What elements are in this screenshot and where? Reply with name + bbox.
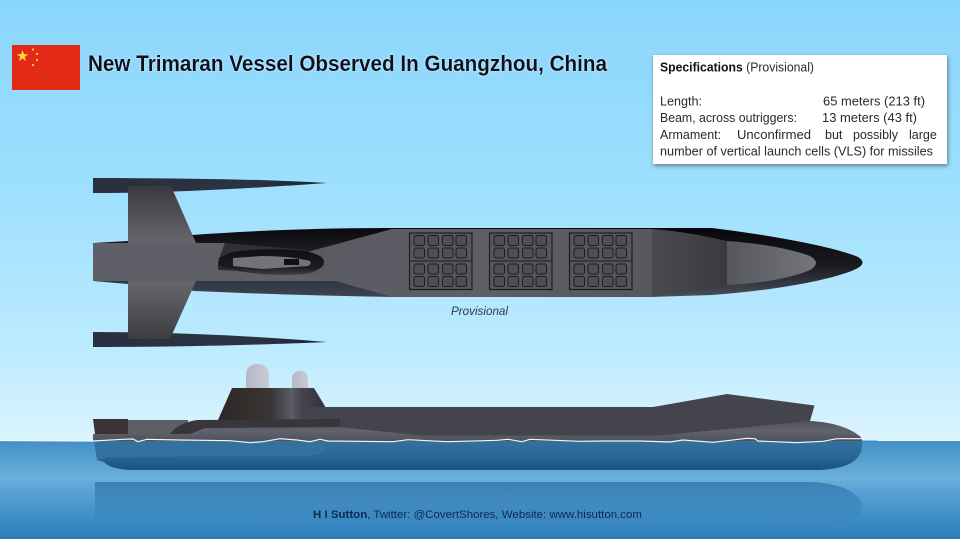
panel: specifications bbox=[653, 55, 947, 164]
specifications heading: Specifications (Provisional) bbox=[660, 60, 814, 74]
water reflection of hull bbox=[95, 482, 862, 530]
top wing strut bbox=[128, 186, 196, 243]
beam label: Beam, across outriggers: bbox=[660, 111, 797, 125]
dome small bbox=[292, 371, 308, 388]
bottom outrigger bbox=[93, 332, 327, 347]
bow bbox=[650, 228, 862, 297]
title: New Trimaran Vessel Observed In Guangzhou, China bbox=[88, 51, 608, 76]
armament text bbox=[660, 128, 937, 142]
superstructure outline bbox=[219, 249, 324, 275]
superstructure tower bbox=[218, 388, 326, 420]
bow nose panel bbox=[727, 241, 816, 285]
credit line: H I Sutton, Twitter: @CovertShores, Website: www.hisutton.com bbox=[313, 509, 642, 521]
recessed well deck bbox=[218, 243, 307, 262]
armament text: Unconfirmed bbox=[737, 128, 811, 142]
superstructure roof bbox=[233, 256, 311, 269]
stern superstructure light bbox=[128, 420, 188, 434]
foredeck bbox=[307, 229, 652, 297]
mid band bbox=[170, 419, 340, 434]
armament text: possibly bbox=[853, 128, 899, 142]
stern deck bbox=[93, 243, 335, 281]
hull below water bbox=[97, 441, 862, 470]
VLS block 2 bbox=[490, 233, 552, 290]
dome large bbox=[246, 364, 269, 388]
armament text continued: number of vertical launch cells (VLS) for missiles bbox=[660, 144, 933, 158]
armament text: but bbox=[825, 128, 843, 142]
length label: Length: bbox=[660, 94, 702, 108]
stern superstructure dark bbox=[93, 419, 128, 434]
beam value: 13 meters (43 ft) bbox=[822, 111, 917, 125]
armament text: Armament: bbox=[660, 128, 721, 142]
main hull side upper bbox=[304, 394, 814, 436]
bottom wing strut bbox=[128, 281, 196, 339]
length value: 65 meters (213 ft) bbox=[823, 94, 925, 108]
hull above water bbox=[93, 421, 862, 441]
provisional label: Provisional bbox=[451, 306, 508, 318]
armament text: large bbox=[909, 128, 937, 142]
waterline bbox=[0, 438, 862, 443]
superstructure hatch bbox=[284, 259, 299, 265]
top view of trimaran bbox=[93, 178, 862, 347]
side view of vessel bbox=[0, 364, 960, 470]
VLS block 3 bbox=[570, 233, 632, 290]
background water bbox=[0, 440, 960, 539]
outrigger below water bbox=[94, 441, 325, 460]
flag of China bbox=[12, 45, 80, 90]
bow deck bbox=[652, 229, 727, 296]
VLS block 1 bbox=[410, 233, 472, 290]
main hull bbox=[93, 228, 652, 297]
top outrigger bbox=[93, 178, 327, 193]
